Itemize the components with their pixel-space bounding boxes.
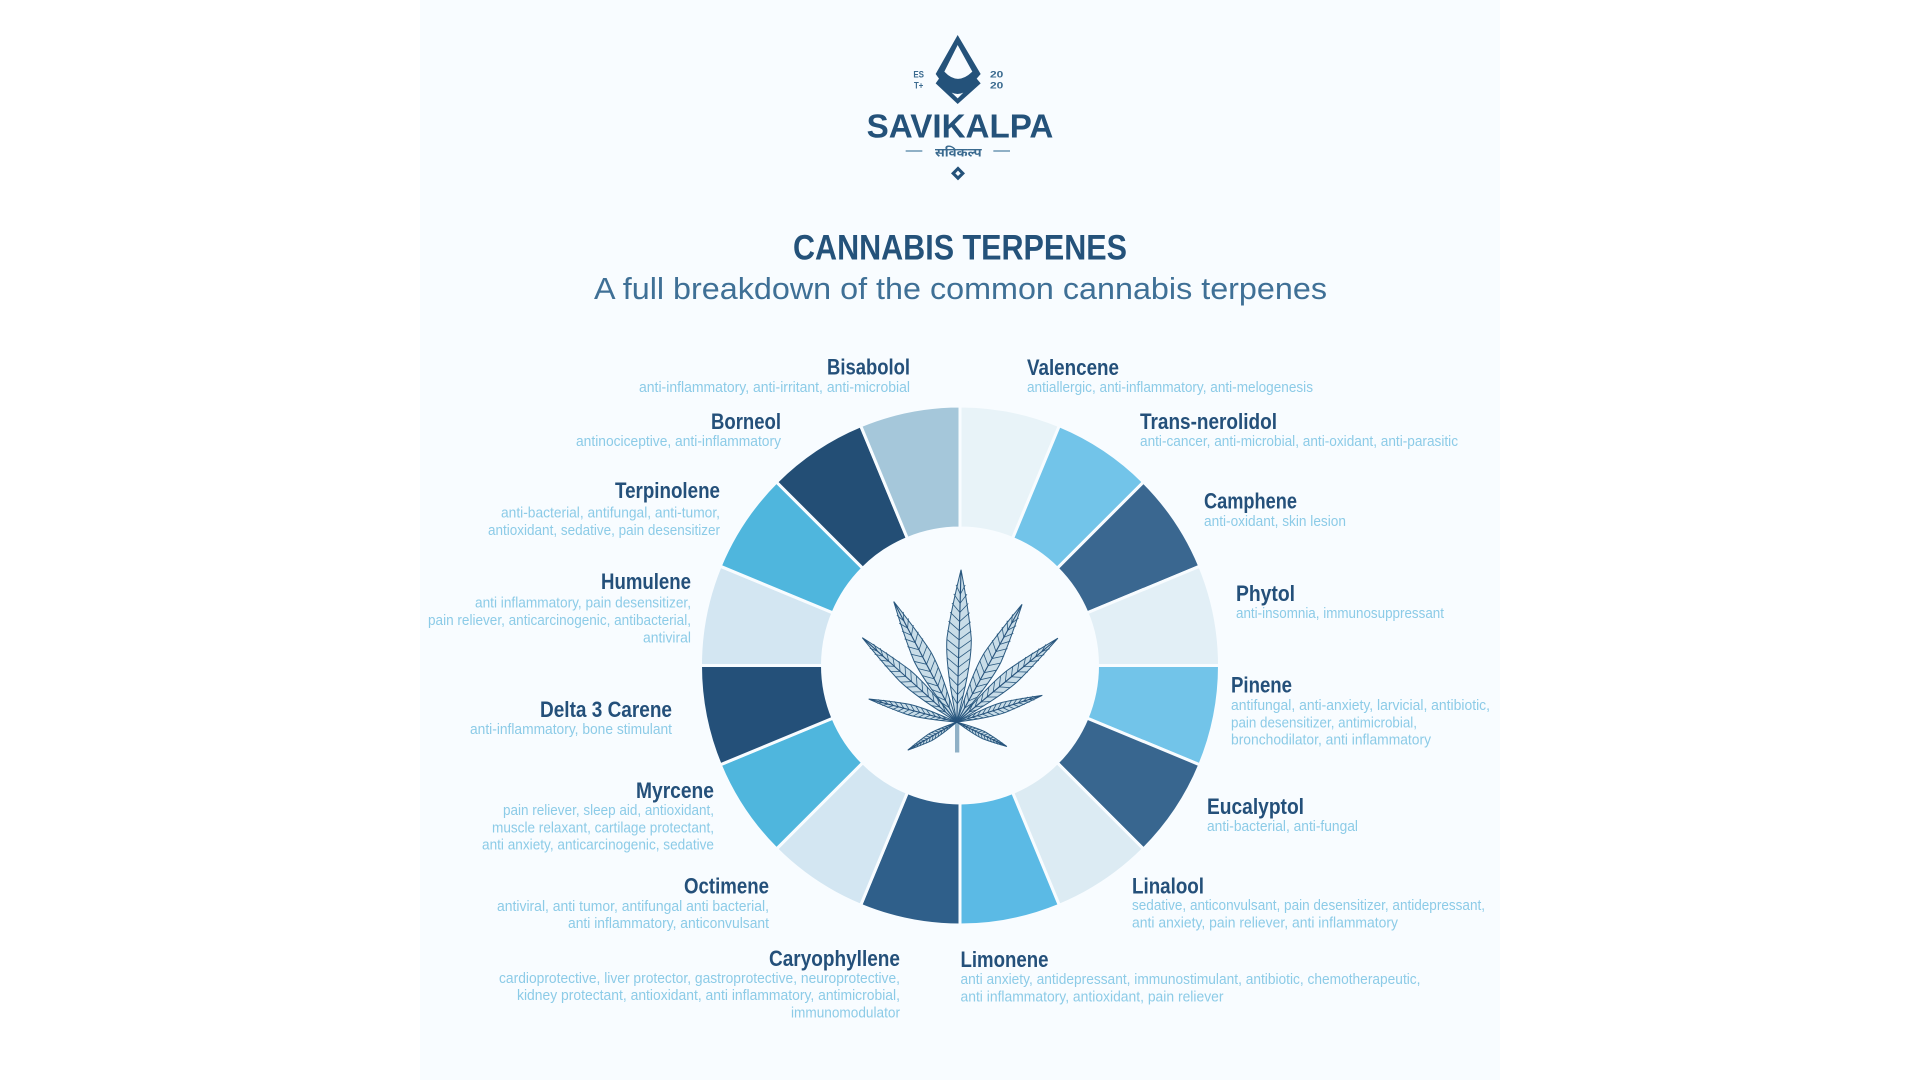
effects line 2: anti anxiety, pain reliever, anti inflammatory bbox=[1132, 914, 1398, 932]
effects: cardioprotective, liver protector, gastroprotective, neuroprotective, bbox=[499, 970, 900, 987]
effects: antiallergic, anti-inflammatory, anti-melogenesis bbox=[1027, 379, 1313, 396]
segment: Octimene bbox=[769, 745, 911, 905]
effects line 3: anti anxiety, anticarcinogenic, sedative bbox=[482, 836, 714, 854]
effects: antifungal, anti-anxiety, larvicial, antibiotic, bbox=[1231, 697, 1490, 714]
text: T+: T+ bbox=[914, 81, 924, 91]
segment: Terpinolene bbox=[720, 474, 881, 617]
name: Camphene bbox=[1204, 488, 1297, 514]
name: Octimene bbox=[684, 874, 769, 898]
effects: antiviral, anti tumor, antifungal anti bacterial, bbox=[497, 898, 769, 915]
name: Humulene bbox=[601, 569, 691, 594]
segment: Caryophyllene bbox=[861, 793, 960, 925]
effects line 2: anti inflammatory, antioxidant, pain reliever bbox=[960, 988, 1224, 1006]
label: Delta 3 Carene bbox=[470, 697, 673, 738]
label: Trans-nerolidol bbox=[1140, 409, 1458, 450]
dash right bbox=[993, 150, 1010, 152]
label: Myrcene bbox=[482, 778, 714, 854]
name: Caryophyllene bbox=[769, 946, 900, 971]
label: Caryophyllene bbox=[499, 946, 900, 1022]
wheel of terpene segments bbox=[682, 388, 1238, 943]
name: Valencene bbox=[1027, 355, 1119, 380]
name: Eucalyptol bbox=[1207, 794, 1304, 819]
effects line 2: pain reliever, anticarcinogenic, antibacterial, bbox=[428, 612, 691, 629]
segment: Linalool bbox=[980, 755, 1143, 919]
icon: small diamond bbox=[951, 166, 965, 180]
effects line 2: antioxidant, sedative, pain desensitizer bbox=[488, 522, 720, 539]
effects: anti-cancer, anti-microbial, anti-oxidant, anti-parasitic bbox=[1140, 433, 1458, 450]
effects: anti-inflammatory, anti-irritant, anti-microbial bbox=[639, 379, 910, 396]
panel: background bbox=[420, 0, 1500, 1080]
segment: Phytol bbox=[1077, 566, 1238, 709]
dash left bbox=[906, 150, 922, 152]
effects: anti-bacterial, antifungal, anti-tumor, bbox=[501, 504, 720, 522]
segment: Humulene bbox=[700, 566, 833, 666]
effects line 3: bronchodilator, anti inflammatory bbox=[1231, 732, 1431, 748]
segment: Delta 3 Carene bbox=[682, 622, 843, 765]
label: Valencene bbox=[1027, 355, 1313, 396]
name: Limonene bbox=[960, 947, 1048, 972]
name: Borneol bbox=[711, 409, 781, 434]
name: Delta 3 Carene bbox=[540, 697, 672, 722]
segment: Borneol bbox=[777, 412, 940, 576]
effects: sedative, anticonvulsant, pain desensitizer, antidepressant, bbox=[1132, 897, 1485, 914]
label: Humulene bbox=[428, 569, 691, 646]
text: 20 lower: 20 bbox=[990, 81, 1003, 91]
segment: Eucalyptol bbox=[1039, 714, 1200, 857]
logo: Savikalpa bbox=[867, 35, 1053, 180]
text: 20 upper: 20 bbox=[990, 69, 1003, 79]
wordmark: SAVIKALPA bbox=[867, 107, 1053, 144]
effects line 3: antiviral bbox=[643, 630, 691, 646]
label: Terpinolene bbox=[488, 478, 720, 539]
label: Borneol bbox=[576, 409, 781, 450]
effects line 2: muscle relaxant, cartilage protectant, bbox=[492, 820, 714, 836]
segment: Trans-nerolidol bbox=[1009, 426, 1151, 586]
label: Phytol bbox=[1236, 581, 1445, 622]
segment: Limonene bbox=[917, 783, 1059, 943]
name: Terpinolene bbox=[615, 478, 720, 503]
label: Octimene bbox=[497, 874, 770, 932]
effects line 2: pain desensitizer, antimicrobial, bbox=[1231, 714, 1417, 732]
text: devanagari name: सविकल्प bbox=[935, 145, 982, 162]
name: Bisabolol bbox=[827, 354, 910, 380]
label: Camphene bbox=[1204, 488, 1346, 530]
segment: Bisabolol bbox=[861, 388, 1003, 548]
icon: drop emblem bbox=[936, 35, 981, 104]
segment: Myrcene bbox=[706, 685, 870, 849]
text: est left: ES bbox=[913, 69, 924, 79]
name: Trans-nerolidol bbox=[1140, 409, 1277, 434]
label: Pinene bbox=[1231, 672, 1490, 748]
name: Myrcene bbox=[636, 778, 714, 803]
label: Eucalyptol bbox=[1207, 794, 1358, 835]
effects: anti-inflammatory, bone stimulant bbox=[470, 721, 673, 738]
effects: anti-bacterial, anti-fungal bbox=[1207, 818, 1358, 835]
effects: anti inflammatory, pain desensitizer, bbox=[475, 594, 691, 612]
label: Limonene bbox=[960, 947, 1420, 1006]
effects: anti anxiety, antidepressant, immunostimulant, antibiotic, chemotherapeutic, bbox=[960, 971, 1420, 988]
segment: Valencene bbox=[960, 406, 1059, 538]
effects line 2: kidney protectant, antioxidant, anti inflammatory, antimicrobial, bbox=[517, 987, 900, 1004]
effects line 3: immunomodulator bbox=[791, 1004, 900, 1022]
segment: Camphene bbox=[1050, 482, 1214, 646]
subtitle: A full breakdown of the common cannabis terpenes bbox=[594, 271, 1327, 306]
effects: pain reliever, sleep aid, antioxidant, bbox=[503, 802, 714, 819]
label: Bisabolol bbox=[639, 354, 910, 396]
name: Phytol bbox=[1236, 581, 1295, 606]
icon: cannabis leaf bbox=[857, 569, 1063, 753]
segment: Pinene bbox=[1087, 666, 1220, 765]
effects line 2: anti inflammatory, anticonvulsant bbox=[568, 915, 770, 932]
name: Pinene bbox=[1231, 672, 1292, 698]
effects: anti-oxidant, skin lesion bbox=[1204, 513, 1346, 530]
effects: antinociceptive, anti-inflammatory bbox=[576, 433, 781, 450]
title: CANNABIS TERPENES bbox=[793, 228, 1127, 268]
label: Linalool bbox=[1132, 874, 1485, 932]
name: Linalool bbox=[1132, 874, 1204, 898]
effects: anti-insomnia, immunosuppressant bbox=[1236, 605, 1445, 622]
